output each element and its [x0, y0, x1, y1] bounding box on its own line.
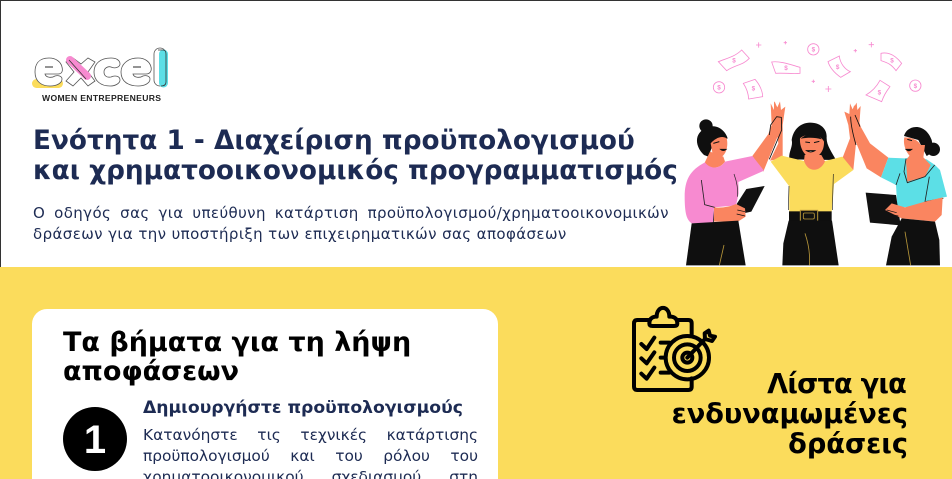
- step description: Κατανόηστε: [143, 426, 238, 444]
- step description: του: [335, 447, 363, 465]
- illustration: three women high-fiving under falling money: $: [717, 85, 721, 92]
- step description: τις: [257, 426, 281, 444]
- title: και χρηματοοικονομικός προγραμματισμός: [33, 156, 678, 186]
- falling money icons: [713, 44, 921, 102]
- panel heading: [63, 327, 411, 387]
- yellow section background: [0, 267, 952, 479]
- logo: excel women entrepreneurs: [32, 48, 168, 103]
- panel: decision-making steps: [32, 309, 498, 479]
- top and left page border: [0, 0, 952, 267]
- heading: list for empowered actions: Λίστα για: [767, 369, 906, 400]
- illustration: three women high-fiving under falling money: $: [878, 89, 882, 96]
- woman in yellow: [770, 101, 861, 265]
- logo: excel women entrepreneurs: WOMEN ENTREPRENEURS: [42, 93, 161, 103]
- subtitle: κατάρτιση: [275, 204, 359, 222]
- illustration: three women high-fiving under falling money: $: [890, 57, 894, 64]
- title: Ενότητα 1 - Διαχείριση προϋπολογισμού: [33, 126, 635, 156]
- step description: τεχνικές: [300, 426, 367, 444]
- step description: του: [450, 447, 478, 465]
- illustration: three women high-fiving under falling money: $: [812, 47, 816, 54]
- subtitle: [33, 204, 669, 243]
- step description: προϋπολογισμού: [143, 447, 270, 465]
- panel heading: Τα βήματα για τη λήψη: [63, 327, 411, 358]
- icon: checklist with target: [632, 306, 717, 392]
- heading: list for empowered actions: [672, 369, 908, 460]
- illustration: three women high-fiving under falling money: $: [914, 83, 918, 90]
- step number badge: 1: [84, 418, 106, 462]
- heading: list for empowered actions: ενδυναμωμένες: [672, 399, 908, 430]
- subtitle: προϋπολογισμού/χρηματοοικονομικών: [368, 204, 669, 222]
- subtitle: οδηγός: [54, 204, 111, 222]
- step description: [143, 426, 478, 479]
- illustration: three women high-fiving under falling money: $: [784, 65, 788, 72]
- subtitle: για: [158, 204, 184, 222]
- illustration: three women high-fiving under falling money: $: [836, 64, 840, 71]
- woman in pink: [685, 101, 782, 265]
- subtitle: σας: [120, 204, 150, 222]
- illustration: three women high-fiving under falling money: $: [752, 86, 756, 93]
- step number badge: [63, 407, 127, 471]
- illustration: three women high-fiving under falling money: [684, 41, 947, 266]
- step description: κατάρτισης: [387, 426, 478, 444]
- woman in blue: [850, 105, 947, 265]
- title: [33, 126, 678, 186]
- step description: και: [290, 447, 315, 465]
- subtitle: Ο: [33, 204, 45, 222]
- subtitle: υπεύθυνη: [192, 204, 266, 222]
- illustration: three women high-fiving under falling money: $: [732, 58, 736, 65]
- heading: list for empowered actions: δράσεις: [788, 429, 908, 460]
- step description: ρόλου: [383, 447, 430, 465]
- panel heading: αποφάσεων: [63, 356, 239, 387]
- step heading: Δημιουργήστε προϋπολογισμούς: [143, 398, 463, 418]
- subtitle: δράσεων για την υποστήριξη των επιχειρηματικών σας αποφάσεων: [33, 225, 567, 243]
